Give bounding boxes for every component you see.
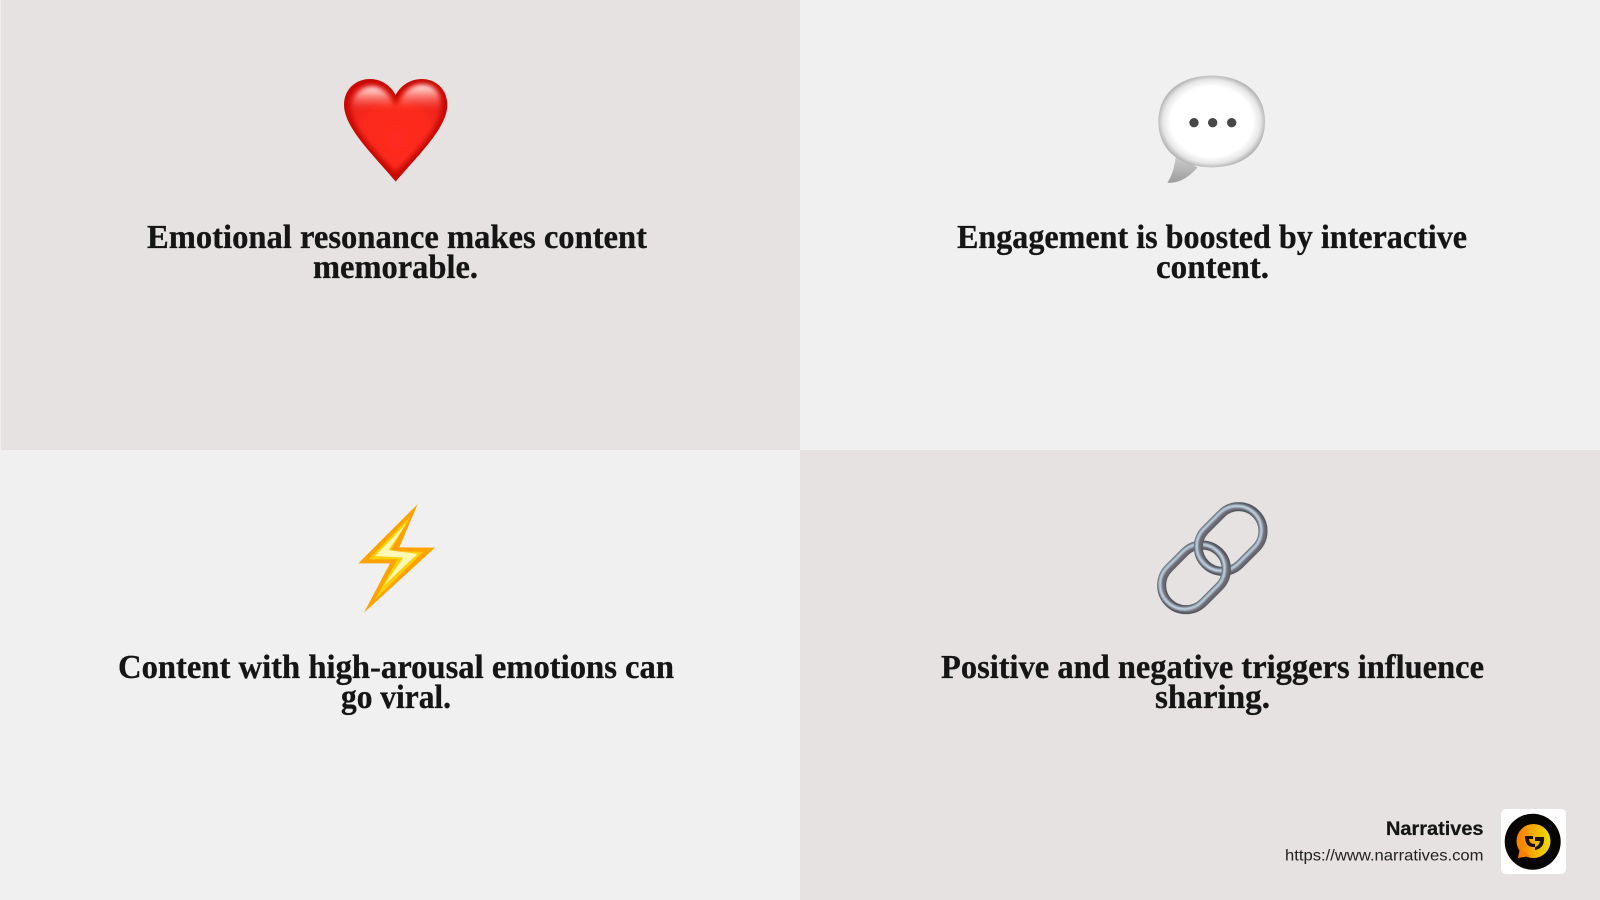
heading: emotional resonance: memorable.	[313, 249, 478, 286]
branding footer	[1285, 809, 1566, 874]
icon: speech bubble	[1158, 76, 1265, 183]
icon: red heart	[344, 79, 447, 182]
heading: engagement	[957, 219, 1467, 286]
heading: triggers: Positive and negative triggers influence	[941, 649, 1484, 686]
brand name: Narratives	[1386, 819, 1484, 840]
heading: emotional resonance: Emotional resonance makes content	[147, 219, 648, 256]
icon: lightning bolt	[358, 504, 435, 613]
panel: high-arousal emotions	[0, 450, 800, 900]
heading: high-arousal emotions: go viral.	[341, 679, 451, 716]
icon: narratives logo	[1501, 809, 1566, 874]
panel: emotional resonance	[0, 0, 800, 450]
heading: triggers: sharing.	[1155, 679, 1270, 716]
heading: high-arousal emotions: Content with high-arousal emotions can	[118, 649, 674, 686]
heading: engagement: Engagement is boosted by interactive	[957, 219, 1467, 256]
heading: emotional resonance	[147, 219, 648, 286]
heading: engagement: content.	[1156, 249, 1269, 286]
heading: high-arousal emotions	[118, 649, 674, 716]
panel: engagement	[800, 0, 1600, 450]
brand url: https://www.narratives.com	[1285, 848, 1484, 864]
icon: chain link	[1157, 502, 1268, 614]
heading: triggers	[941, 649, 1484, 716]
panel: triggers	[800, 450, 1600, 900]
